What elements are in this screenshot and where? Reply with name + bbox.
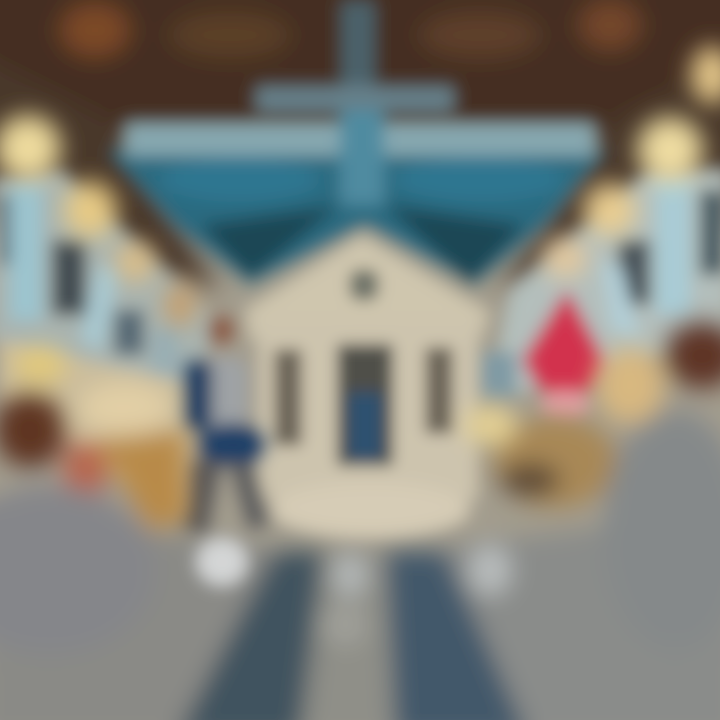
blue glass roof xyxy=(108,0,605,285)
lamps xyxy=(0,47,720,327)
left wall and columns xyxy=(0,170,215,520)
left group of people and table xyxy=(0,347,188,655)
right wall and columns xyxy=(480,170,720,400)
right group of people and table xyxy=(464,321,720,650)
building xyxy=(245,235,490,538)
floor xyxy=(0,510,720,720)
red flag xyxy=(524,292,606,419)
ceiling xyxy=(0,0,720,290)
person walking xyxy=(182,315,270,586)
feet shapes on floor xyxy=(323,544,512,645)
building doors and windows xyxy=(275,270,452,465)
